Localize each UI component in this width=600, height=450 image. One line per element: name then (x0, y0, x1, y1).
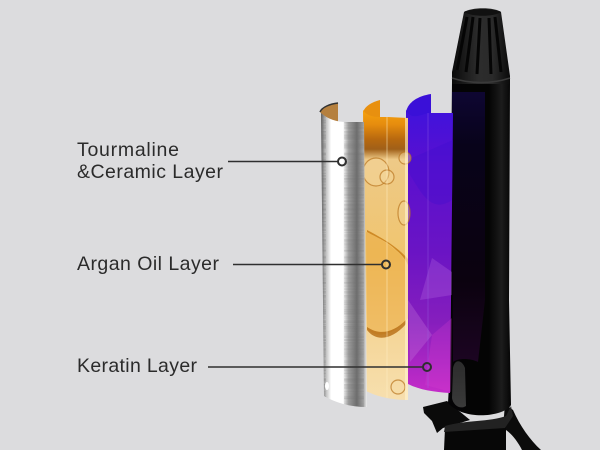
wand barrel (448, 82, 511, 415)
callout: argan leader (233, 260, 390, 268)
nozzle cap (452, 8, 510, 84)
panel: argan oil layer (363, 100, 411, 400)
curling wand (423, 8, 541, 450)
oil drop (366, 232, 408, 335)
callout: tourmaline leader (228, 158, 346, 166)
label: Tourmaline & Ceramic Layer: Tourmaline (77, 139, 179, 161)
label: Tourmaline & Ceramic Layer: &Ceramic Layer (77, 161, 224, 183)
panel: tourmaline ceramic silver layer (320, 103, 367, 410)
collar (444, 406, 513, 432)
callout: keratin leader (208, 363, 431, 371)
wand flange (423, 401, 470, 433)
barrel highlight (452, 361, 466, 407)
oil bubbles (363, 152, 411, 394)
barrel reflection (452, 92, 485, 362)
label: Keratin Layer: Keratin Layer (77, 355, 198, 377)
panel: keratin purple layer (406, 94, 453, 393)
wand handle base (444, 418, 506, 450)
label: Tourmaline & Ceramic Layer (77, 139, 224, 183)
label: Argan Oil Layer: Argan Oil Layer (77, 253, 220, 275)
cord (503, 404, 541, 450)
